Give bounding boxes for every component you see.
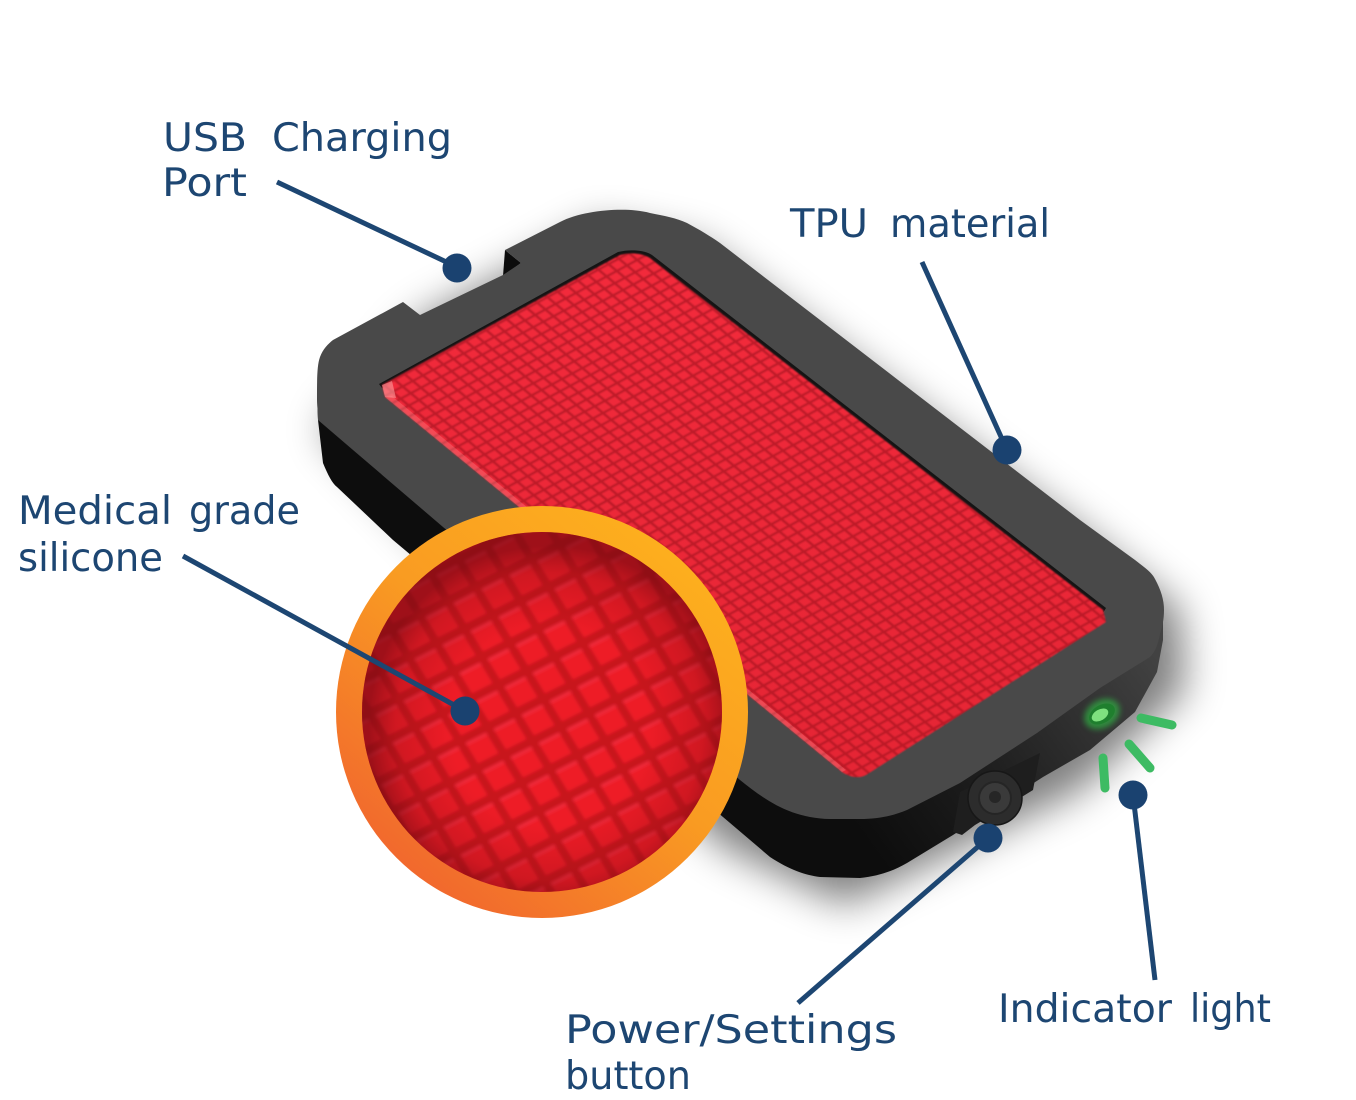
callout: medical grade silicone: silicone: [18, 536, 163, 581]
callout: power/settings button: [565, 824, 1002, 1099]
USB port notch: [503, 250, 521, 276]
callout: power/settings button: button: [565, 1054, 691, 1099]
callout: USB charging port: USB: [163, 116, 247, 161]
callout: TPU material: TPU: [789, 202, 868, 247]
indicator LED: [1079, 692, 1125, 736]
indicator light rays: [1103, 718, 1172, 788]
soft drop shadow: [322, 225, 1185, 905]
red silicone panel: [382, 253, 1106, 777]
callout: medical grade silicone: Medical: [18, 489, 172, 534]
callout: TPU material: material: [890, 202, 1050, 247]
panel inset edge: [379, 250, 1106, 613]
orange ring: [336, 506, 748, 918]
callout: TPU material: [789, 202, 1050, 464]
TPU top face: [317, 210, 1164, 819]
callout: indicator light: light: [1190, 987, 1271, 1032]
callout: USB charging port: [162, 116, 472, 282]
callout: USB charging port: Port: [162, 161, 247, 206]
magnified silicone detail circle: [336, 506, 748, 918]
device: heated pad: [317, 210, 1185, 905]
power button: [953, 753, 1040, 835]
callout: medical grade silicone: [18, 489, 480, 726]
magnified texture: [362, 532, 722, 892]
callout: power/settings button: Power/Settings: [565, 1008, 897, 1053]
device side walls: [317, 300, 1163, 878]
callout: medical grade silicone: grade: [189, 489, 300, 534]
callout: USB charging port: Charging: [272, 116, 452, 161]
callout: indicator light: [998, 780, 1271, 1032]
callout: indicator light: Indicator: [998, 987, 1173, 1032]
